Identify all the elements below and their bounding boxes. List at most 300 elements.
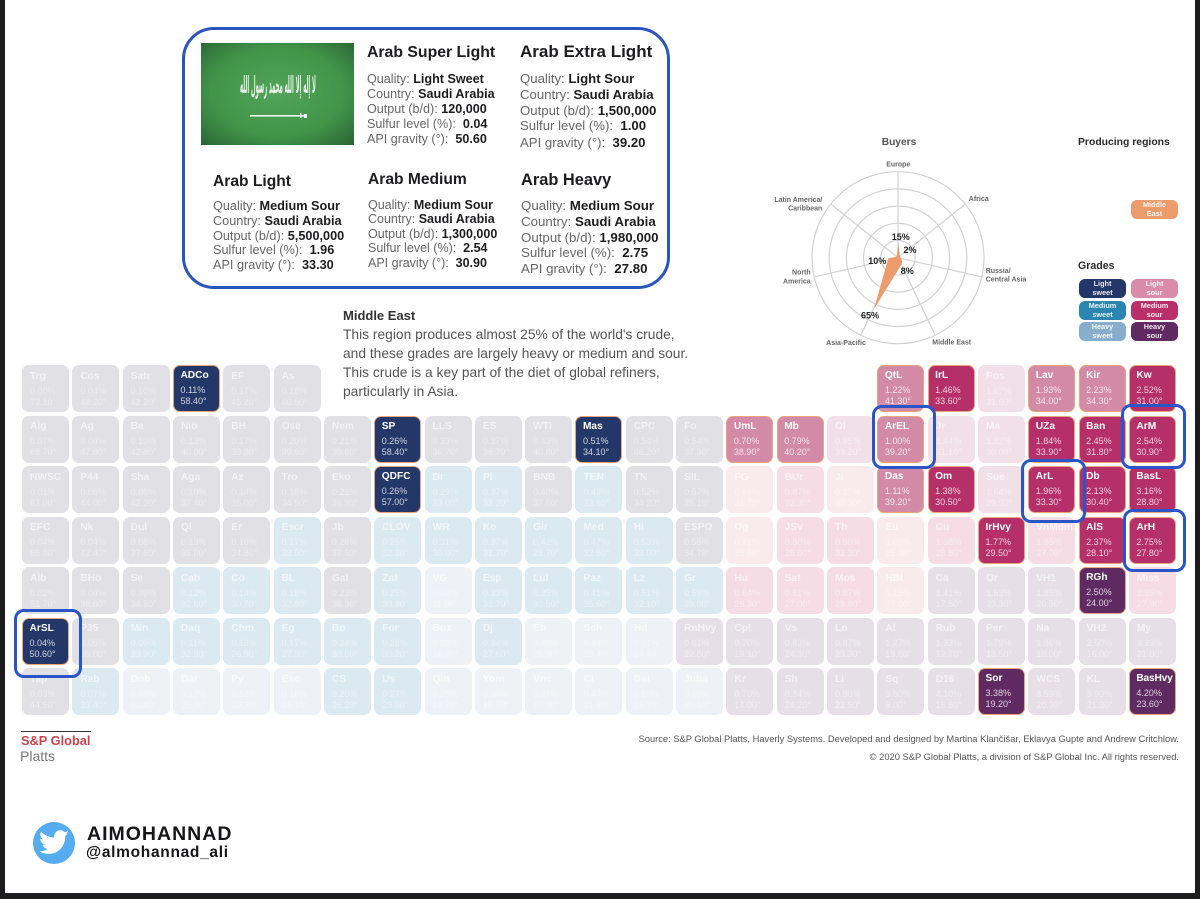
grid row 1: ADCo <box>180 370 209 381</box>
grid row 2: 39.20° <box>835 447 861 457</box>
grid row 7: Yom <box>483 674 504 684</box>
grid row 4: 0.13% <box>181 537 206 547</box>
grid row 3: 1.38% <box>935 486 961 496</box>
grid row 7: 16.80° <box>936 700 962 710</box>
grid row 4: CLOV <box>382 522 410 533</box>
grid row 2: 38.90° <box>734 446 760 456</box>
grid row 6: 32.30° <box>181 649 207 659</box>
text block: Twitter handle <box>86 823 232 861</box>
grid row 5: 2.85% <box>1137 588 1162 598</box>
grid row 4: Jb <box>332 522 344 533</box>
grid row 1: Kir <box>1086 370 1100 381</box>
grid row 6: 33.90° <box>131 649 157 659</box>
grid row 1: 0.17% <box>231 386 257 396</box>
grid row 2: 68.70° <box>30 447 56 457</box>
grid row 1: 33.60° <box>935 396 961 406</box>
grid row 1: 58.40° <box>180 396 207 406</box>
grid row 7: 25.00° <box>181 700 207 710</box>
text block: Arab Super Light: Arab Super Light <box>367 44 495 61</box>
grid row 6: ArSL <box>30 622 54 634</box>
grid row 6: 30.20° <box>382 649 408 659</box>
grid row 4: 28.80° <box>936 548 962 558</box>
grid row 1: 31.60° <box>986 396 1012 406</box>
grid row 1: 31.00° <box>1136 396 1162 406</box>
grid row 1: 34.00° <box>1036 396 1062 406</box>
grid row 4: 32.30° <box>382 548 408 558</box>
grid row 2: WTI <box>533 421 552 432</box>
grid row 7: 0.37% <box>533 688 559 698</box>
grid row 6: Vs <box>785 623 797 634</box>
grid row 7: Kr <box>734 674 746 684</box>
grid row 1: 0.10% <box>131 386 156 396</box>
text block: Middle East description: This crude is a key part of the diet of global refiners, <box>343 365 660 380</box>
grid row 4: Hi <box>634 522 644 533</box>
grid row 4: 0.16% <box>231 537 257 547</box>
grid row 2: 0.70% <box>734 436 759 446</box>
grid row 4: 27.00° <box>1036 548 1062 558</box>
grid row 5: Sat <box>785 572 801 584</box>
grid row 3: BNB <box>533 472 555 482</box>
grid row 4: 0.26% <box>332 537 357 547</box>
grid row 5: Or <box>986 572 998 584</box>
grid row 4: 0.04% <box>30 537 56 547</box>
grid row 5: 20.50° <box>1036 598 1062 608</box>
grid row 1: 48.20° <box>80 396 106 406</box>
grid row 6: 50.60° <box>30 648 56 658</box>
grid row 6: 3.23% <box>1137 638 1162 648</box>
chart: buyers radar: 2% <box>903 245 917 255</box>
grid row 6: 13.50° <box>986 649 1012 659</box>
grid row 2: 1.00% <box>885 436 910 446</box>
chart: buyers radar: Africa <box>969 196 989 203</box>
legend: Light sweet: Light <box>1094 279 1111 288</box>
grid row 1: 41.30° <box>885 396 911 406</box>
callout: ArM highlight <box>1121 404 1186 469</box>
chart: buyers radar: North <box>792 270 811 277</box>
grid row 3: 32.30° <box>785 498 811 508</box>
grid row 7: WCS <box>1036 674 1060 684</box>
text block: Middle East description: and these grades are largely heavy or medium and sour. <box>343 346 688 361</box>
grid row 5 <box>22 567 1176 614</box>
grid row 3: 42.20° <box>131 498 157 508</box>
grid row 3: SIL <box>684 472 700 482</box>
grid row 3: TN <box>634 472 647 482</box>
chart: buyers radar: 10% <box>868 256 886 266</box>
grid row 6: Bo <box>332 623 345 634</box>
grid row 5: 0.33% <box>432 588 458 598</box>
chart: buyers radar: 65% <box>861 310 879 320</box>
grid row 3: 28.80° <box>1136 497 1162 507</box>
grid row 2: 0.43% <box>533 436 559 446</box>
grid row 2: 37.30° <box>684 447 710 457</box>
grid row 1: 2.23% <box>1086 385 1112 395</box>
chart: periodic table of crude grades <box>22 365 1176 715</box>
grid row 1 <box>22 365 1176 412</box>
grid row 5: 27.00° <box>785 598 811 608</box>
grid row 6: Lo <box>835 623 847 634</box>
grid row 2: UZa <box>1036 420 1055 432</box>
grid row 5: 0.35% <box>533 588 559 598</box>
grid row 2: 0.37% <box>483 436 508 446</box>
grid row 5: Gr <box>684 572 696 584</box>
grid row 3: 1.64% <box>986 486 1011 496</box>
grid row 4: 0.55% <box>684 537 710 547</box>
text block: Arab Light: Sulfur level (%): 1.96 <box>213 243 334 257</box>
grid row 5: 0.64% <box>734 588 760 598</box>
text block: Arab Light: Output (b/d): 5,500,000 <box>213 229 344 243</box>
grid row 4: 32.80° <box>583 548 610 558</box>
grid row 3: 33.30° <box>1036 497 1062 507</box>
legend: Heavy sweet: Heavy <box>1092 322 1113 331</box>
grid row 3: 34.20° <box>634 498 660 508</box>
grid row 3: 3.16% <box>1136 486 1162 496</box>
grid row 7: 20.10° <box>684 700 710 710</box>
grid row 3: 31.70° <box>734 498 760 508</box>
grid row 4: Gir <box>533 522 548 533</box>
grid row 4: Th <box>835 522 847 533</box>
grid row 7: 0.84% <box>785 688 810 698</box>
grid row 3: Sha <box>131 472 149 482</box>
grid row 7: 21.40° <box>131 700 157 710</box>
grid row 5: 0.25% <box>382 588 408 598</box>
grid row 6: RnHvy <box>684 623 716 634</box>
callout: ArEL highlight <box>872 405 936 469</box>
grid row 2: 2.45% <box>1086 436 1112 446</box>
grid row 7: 0.70% <box>734 688 760 698</box>
grid row 5: 30.50° <box>533 598 559 608</box>
grid row 2: Ma <box>986 421 1000 432</box>
grid row 7: BasHvy <box>1136 673 1173 684</box>
legend: Light sweet <box>1079 279 1126 298</box>
grid row 1: 0.18% <box>282 386 307 396</box>
grid row 7: Dar <box>181 674 198 684</box>
grid row 1: As <box>282 370 295 382</box>
grid row 5: 1.41% <box>936 588 961 598</box>
grid row 4: IrHvy <box>985 522 1011 532</box>
text block: Arab Super Light: Quality: Light Sweet <box>367 72 484 86</box>
text block: Middle East description: Middle East <box>343 308 415 323</box>
text block: Arab Medium: Arab Medium <box>368 171 467 188</box>
text block: Arab Extra Light: Sulfur level (%): 1.00 <box>520 118 646 133</box>
grid row 5: 0.33% <box>483 588 508 598</box>
grid row 7: 0.50% <box>634 688 659 698</box>
grid row 4: Ql <box>181 522 192 533</box>
grid row 4: 0.17% <box>282 537 307 547</box>
grid row 5: Co <box>231 572 245 584</box>
grid row 3: Tro <box>282 472 297 482</box>
grid row 7: 3.59% <box>1036 688 1062 698</box>
grid row 7: Esc <box>282 674 300 684</box>
grid row 4: 0.53% <box>634 537 659 547</box>
grid row 7: Qin <box>432 674 449 684</box>
text block: copyright: © 2020 S&P Global Platts, a division of S&P Global Inc. All rights reserved. <box>870 752 1179 762</box>
grid row 7: 29.00° <box>382 700 408 710</box>
grid row 2: Alg <box>30 421 46 432</box>
grid row 2: 0.04% <box>80 436 106 446</box>
grid row 7: 14.00° <box>734 700 760 710</box>
grid row 3: Ji <box>835 472 844 482</box>
grid row 4: 0.25% <box>382 537 408 547</box>
legend: Medium sweet: Medium <box>1089 301 1116 310</box>
grid row 4: 0.80% <box>785 537 810 547</box>
grid row 2: SP <box>382 420 395 432</box>
text block: Arab Extra Light <box>520 42 656 150</box>
grid row 3: BUr <box>785 472 803 482</box>
grid row 4: Cu <box>936 522 949 533</box>
grid row 6: 0.87% <box>835 638 861 648</box>
grid row 1: 1.46% <box>935 385 961 395</box>
grid row 3: TEN <box>583 472 604 482</box>
grid row 5: 0.59% <box>684 588 710 598</box>
grid row 4: 1.85% <box>1036 537 1062 547</box>
grid row 5: Se <box>131 572 143 584</box>
grid row 3: 36.90° <box>332 498 358 508</box>
grid row 3: 0.43% <box>583 486 609 496</box>
text block: Twitter handle: AIMOHANNAD <box>87 823 232 845</box>
grid row 2: CPC <box>634 421 655 432</box>
grid row 5: 51.70° <box>30 598 56 608</box>
grid row 6: Eb <box>533 623 546 634</box>
grid row 5: 1.63% <box>986 588 1011 598</box>
grid row 5: Zaf <box>382 572 397 584</box>
grid row 3: 0.21% <box>332 486 357 496</box>
grid row 2: Ose <box>282 421 301 432</box>
text block: Arab Medium: Output (b/d): 1,300,000 <box>368 227 497 241</box>
grid row 6: 0.13% <box>231 638 257 648</box>
grid row 7: Tap <box>30 674 47 684</box>
grid row 2: 31.10° <box>936 447 962 457</box>
grid row 2: 30.00° <box>986 447 1012 457</box>
grid row 2: 0.13% <box>181 436 206 446</box>
text block: Twitter handle: @almohannad_ali <box>86 844 229 861</box>
text block: Arab Heavy: API gravity (°): 27.80 <box>521 261 648 276</box>
grid row 7: 0.12% <box>181 688 206 698</box>
grid row 2: 0.10% <box>131 436 156 446</box>
grid row 7: 0.27% <box>382 688 408 698</box>
grid row 7: Us <box>382 674 395 684</box>
grid row 7: 0.03% <box>30 688 56 698</box>
grid row 5: 29.00° <box>684 598 710 608</box>
grid row 5: 0.02% <box>30 588 56 598</box>
grid row 7: 22.50° <box>835 700 861 710</box>
grid row 6: 21.90° <box>1137 649 1163 659</box>
grid row 7: 20.90° <box>1036 700 1062 710</box>
grid row 2: 33.90° <box>1036 446 1062 456</box>
grid row 5: 32.60° <box>181 598 207 608</box>
grid row 2: Ban <box>1086 420 1105 432</box>
grid row 6: 0.40% <box>533 638 559 648</box>
text block: Arab Extra Light: API gravity (°): 39.20 <box>520 135 646 150</box>
grid row 4: 0.08% <box>131 537 156 547</box>
text block: Arab Heavy: Output (b/d): 1,980,000 <box>521 230 658 244</box>
grid row 6: Na <box>1036 623 1049 634</box>
grid row 2: ArEL <box>885 420 909 432</box>
grid row 4: Og <box>734 522 749 533</box>
grid row 5: HBI <box>885 572 903 584</box>
grid row 7: 3.99% <box>1087 688 1112 698</box>
grid row 5: 0.04% <box>80 588 106 598</box>
grid row 3: Aga <box>181 472 200 482</box>
grid row 1: Trg <box>30 370 46 382</box>
grid row 3: Az <box>231 472 244 482</box>
grid row 2: Mb <box>784 420 799 432</box>
grid row 6: 1.33% <box>936 638 961 648</box>
grid row 2: 0.51% <box>583 436 608 446</box>
grid row 6: 24.40° <box>634 649 660 659</box>
text block: Arab Heavy <box>521 171 658 276</box>
grid row 1: Lav <box>1036 370 1053 381</box>
grid row 4: 25.60° <box>734 548 760 558</box>
grid row 2: Jr <box>936 421 945 432</box>
legend: Medium sour: Medium <box>1141 301 1168 310</box>
grid row 3: Dr <box>432 472 444 482</box>
grid row 5: 28.30° <box>734 598 760 608</box>
grid row 2: 42.80° <box>131 447 157 457</box>
logo: S&P Global Platts: Platts <box>20 748 55 764</box>
grid row 4: 0.37% <box>483 537 508 547</box>
grid row 5: 11.00° <box>432 598 458 608</box>
grid row 2: BH <box>231 421 246 432</box>
logo: S&P Global Platts <box>21 731 91 765</box>
grid row 3: P44 <box>80 472 98 482</box>
heading: Buyers: Buyers <box>882 137 916 148</box>
grid row 7: 3.38% <box>985 688 1011 698</box>
grid row 2: 40.80° <box>533 447 559 457</box>
grid row 2: 1.84% <box>1036 436 1061 446</box>
grid row 6: Chm <box>231 623 254 634</box>
grid row 1: IrL <box>935 370 948 381</box>
grid row 7: KL <box>1087 674 1100 684</box>
grid row 7: 0.12% <box>231 688 257 698</box>
chart: buyers radar: Asia-Pacific <box>826 340 866 347</box>
grid row 7: Vnc <box>533 674 552 684</box>
grid row 7: 23.60° <box>1136 699 1162 709</box>
text block: Arab Heavy: Country: Saudi Arabia <box>521 214 656 229</box>
text block: Middle East description: This region produces almost 25% of the world's crude, <box>343 327 675 342</box>
text block: Arab Super Light <box>367 44 495 146</box>
grid row 4: AlS <box>1086 522 1103 532</box>
grid row 6: Boz <box>432 623 451 634</box>
chart: buyers radar: 15% <box>892 232 910 242</box>
grid row 7: 18.70° <box>432 700 459 710</box>
grid row 3: 37.40° <box>181 498 207 508</box>
grid row 5: RGh <box>1086 572 1108 583</box>
grid row 2: 0.17% <box>231 436 257 446</box>
legend: Light sour: sour <box>1147 288 1162 297</box>
text block: Arab Medium: Country: Saudi Arabia <box>368 212 495 226</box>
grid row 4: 0.90% <box>835 537 861 547</box>
grid row 3: QDFC <box>382 471 411 482</box>
grid row 1: Pos <box>986 370 1005 382</box>
grid row 7: D16 <box>936 674 954 684</box>
text block: Middle East description <box>343 308 688 399</box>
grid row 2: 39.60° <box>332 447 358 457</box>
grid row 6: 0.51% <box>634 638 659 648</box>
grid row 6: 16.00° <box>1087 649 1113 659</box>
text block: Arab Extra Light: Arab Extra Light <box>520 42 652 61</box>
grid row 6: Rub <box>936 623 955 634</box>
chart: buyers radar <box>774 162 1026 347</box>
grid row 4 <box>22 517 1176 564</box>
legend: Middle East region: Middle <box>1143 200 1166 209</box>
text block: Arab Medium: Quality: Medium Sour <box>368 198 493 212</box>
grid row 4: JSv <box>785 522 803 533</box>
grid row 3: 1.11% <box>885 486 910 496</box>
grid row 2: 36.70° <box>432 447 459 457</box>
grid row 3: Sue <box>986 472 1005 482</box>
grid row 3: BasL <box>1136 471 1161 482</box>
grid row 7: Sor <box>985 673 1002 684</box>
grid row 6: 0.24% <box>332 638 357 648</box>
grid row 4: 37.60° <box>131 548 157 558</box>
grid row 2: 2.54% <box>1136 436 1162 446</box>
grid row 6: 2.50% <box>1087 638 1112 648</box>
grid row 4: 55.00° <box>30 548 56 558</box>
grid row 3: 0.87% <box>785 486 810 496</box>
grid row 4: ESPO <box>684 522 712 533</box>
text block: Middle East description: particularly in Asia. <box>343 384 458 399</box>
grid row 1: QtL <box>885 370 902 381</box>
grid row 2: 40.00° <box>181 447 207 457</box>
grid row 4: 0.04% <box>80 537 106 547</box>
grid row 4: 33.00° <box>634 548 660 558</box>
grid row 2 <box>22 416 1176 463</box>
grid row 3: Pl <box>483 472 492 482</box>
grid row 6: 0.11% <box>181 638 206 648</box>
grid row 3: 1.96% <box>1036 486 1061 496</box>
grid row 7: 17.50° <box>533 700 559 710</box>
grid row 4: 37.60° <box>332 548 358 558</box>
grid row 4: 27.80° <box>1136 548 1162 558</box>
grid row 2: 0.07% <box>30 436 56 446</box>
chart: buyers radar: Russia/ <box>986 268 1011 275</box>
grid row 6: Hd <box>634 623 647 634</box>
grid row 2: 39.30° <box>231 447 257 457</box>
legend: Heavy sour <box>1131 322 1178 341</box>
grid row 6: 16.90° <box>432 649 459 659</box>
grid row 6: 35.00° <box>80 649 106 659</box>
text block: Arab Heavy: Sulfur level (%): 2.75 <box>521 245 648 260</box>
grid row 2: 47.80° <box>80 447 106 457</box>
grid row 6: Min <box>131 623 148 634</box>
grid row 3: Das <box>885 471 904 482</box>
legend: Medium sour <box>1131 301 1178 320</box>
grid row 6: 24.30° <box>785 649 811 659</box>
grid row 4: 28.10° <box>1086 548 1112 558</box>
grid row 5: 35.60° <box>583 598 610 608</box>
grid row 7: 33.40° <box>80 700 106 710</box>
grid row 3: 0.29% <box>432 486 458 496</box>
grid row 6: 0.70% <box>734 638 760 648</box>
grid row 4: Er <box>231 522 242 533</box>
grid row 1: 42.20° <box>131 396 157 406</box>
grid row 4: Nk <box>80 522 93 533</box>
text block: Arab Super Light: API gravity (°): 50.60 <box>367 132 487 146</box>
grid row 7: 19.20° <box>231 700 257 710</box>
legend: Light sour: Light <box>1146 279 1163 288</box>
grid row 3: Om <box>935 471 952 482</box>
grid row 4: 1.77% <box>985 536 1011 546</box>
grid row 7: 16.70° <box>483 700 509 710</box>
grid row 5: 30.70° <box>231 598 257 608</box>
grid row 7: 0.16% <box>282 688 307 698</box>
grid row 5: 0.12% <box>181 588 206 598</box>
grid row 3: 44.00° <box>80 498 106 508</box>
grid row 5: 1.85% <box>1036 588 1062 598</box>
grid row 4: ArH <box>1136 522 1155 532</box>
legend: Middle East region: East <box>1147 209 1162 218</box>
grid row 7: 0.47% <box>583 688 609 698</box>
